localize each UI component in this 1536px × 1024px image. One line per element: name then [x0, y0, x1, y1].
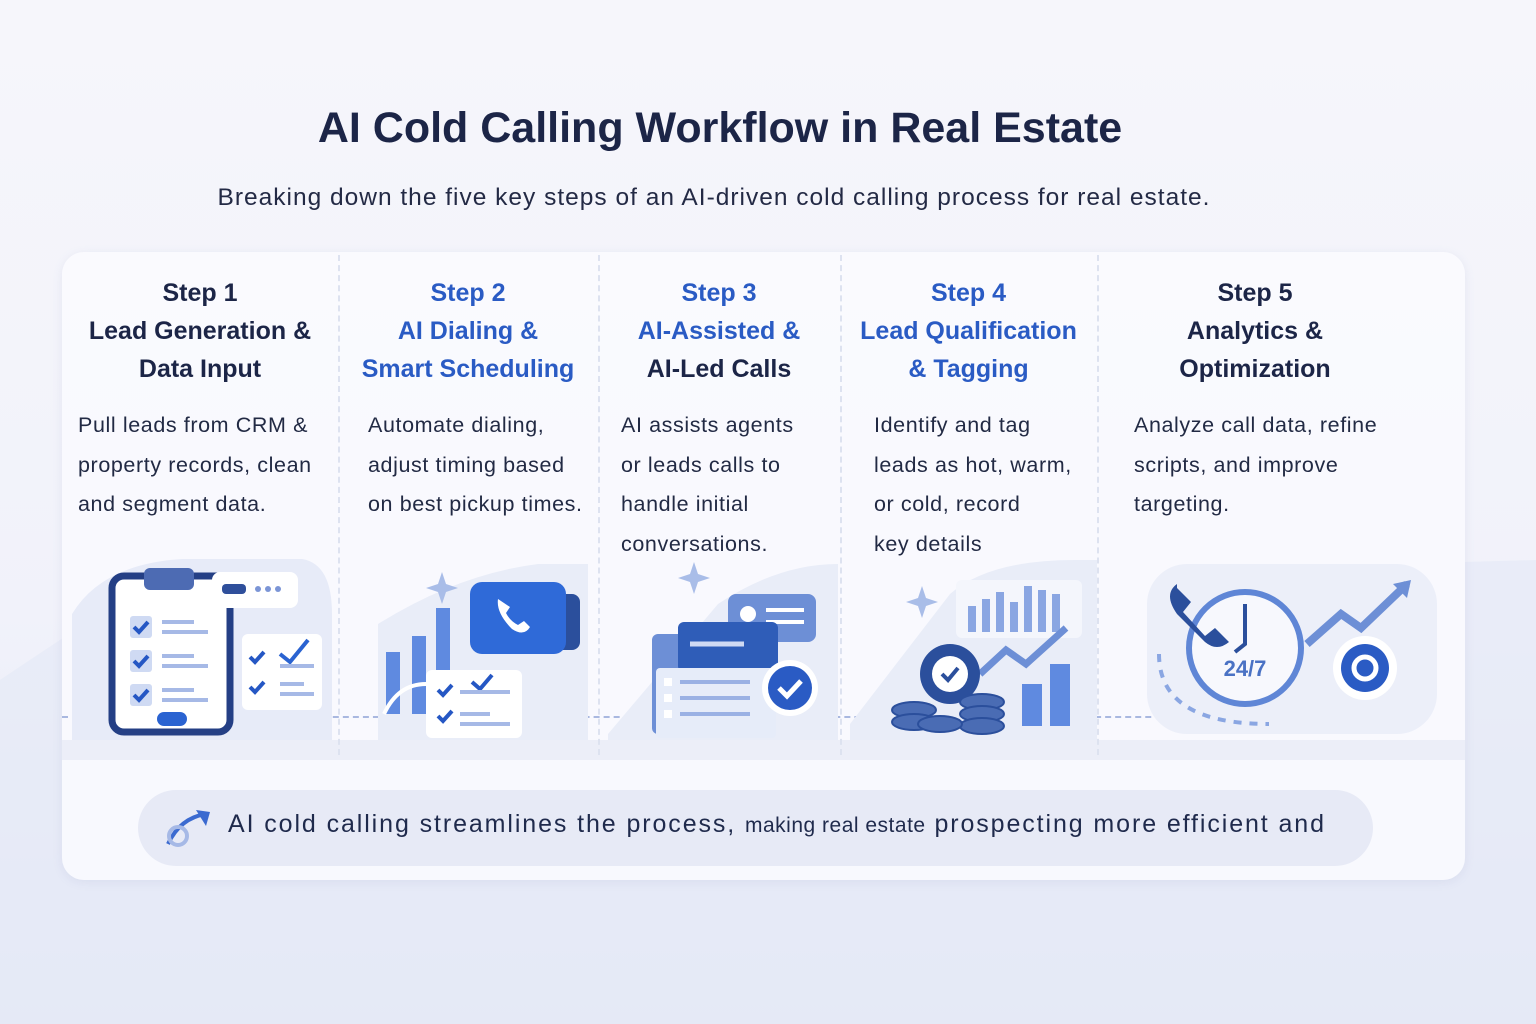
heading: step 4 [860, 279, 1077, 383]
heading: step 5: Step 5 [1217, 279, 1293, 307]
heading: step 5 [1179, 279, 1331, 383]
heading: step 5: Optimization [1179, 355, 1331, 383]
icon: clipboard checklist [72, 559, 332, 740]
text: step 4: or cold, record [874, 492, 1020, 516]
text: step 5: targeting. [1134, 492, 1230, 516]
text: step 2: adjust timing based [368, 452, 565, 476]
text: step 1: Pull leads from CRM & [78, 413, 308, 437]
panel: step 3 [608, 279, 838, 740]
heading: step 1 [89, 279, 311, 383]
heading: step 5: Analytics & [1187, 317, 1323, 345]
text: step 3 [621, 413, 794, 556]
heading: step 3: Step 3 [681, 279, 757, 307]
text: step 2: Automate dialing, [368, 413, 544, 437]
heading: step 4: & Tagging [908, 355, 1029, 383]
heading: step 1: Data Input [139, 355, 261, 383]
text: step 4: key details [874, 532, 982, 556]
heading: step 4: Lead Qualification [860, 317, 1077, 345]
panel: step 1 [72, 279, 332, 740]
text: step 3: handle initial [621, 492, 749, 516]
background wave [1466, 560, 1536, 612]
panel: step 2 [362, 279, 588, 740]
text: step 3: AI assists agents [621, 413, 794, 437]
text: step 3: or leads calls to [621, 452, 781, 476]
heading: step 3 [638, 279, 800, 383]
text: step 4: leads as hot, warm, [874, 452, 1072, 476]
heading: step 2: AI Dialing & [398, 317, 538, 345]
icon: 24/7 clock analytics [1147, 564, 1437, 734]
text: step 5: scripts, and improve [1134, 452, 1338, 476]
text: step 5 [1134, 413, 1377, 516]
heading: step 2 [362, 279, 574, 383]
text: step 2: on best pickup times. [368, 492, 583, 516]
title: AI Cold Calling Workflow in Real Estate [318, 104, 1122, 152]
text: step 4: Identify and tag [874, 413, 1031, 437]
heading: step 1: Lead Generation & [89, 317, 311, 345]
text: step 2 [368, 413, 583, 516]
heading: step 2: Step 2 [430, 279, 506, 307]
dashed timeline [62, 716, 1402, 718]
icon: chat folder check [608, 562, 838, 740]
panel: step 5 [1134, 279, 1437, 734]
text: step 1: and segment data. [78, 492, 266, 516]
icon: gear coins chart [850, 560, 1097, 740]
heading: step 3: AI-Led Calls [647, 355, 791, 383]
callout [138, 790, 1373, 866]
heading: step 1: Step 1 [162, 279, 238, 307]
heading: step 2: Smart Scheduling [362, 355, 574, 383]
callout text: AI cold calling streamlines the process, making real estate prospecting more efficient and [228, 810, 1326, 838]
icon: phone dialing chart [378, 564, 588, 740]
panel: step 4 [850, 279, 1097, 740]
heading: step 4: Step 4 [931, 279, 1006, 307]
text: step 4 [874, 413, 1072, 556]
text: step 5: Analyze call data, refine [1134, 413, 1377, 437]
icon: 24/7 clock analytics: 24/7 [1224, 656, 1266, 681]
heading: step 3: AI-Assisted & [638, 317, 800, 345]
text: step 1 [78, 413, 312, 516]
text: step 1: property records, clean [78, 452, 312, 476]
text: step 3: conversations. [621, 532, 768, 556]
subtitle: Breaking down the five key steps of an AI-driven cold calling process for real estate. [218, 184, 1210, 211]
icon: arrow [166, 810, 210, 847]
panel: main card [62, 252, 1465, 880]
